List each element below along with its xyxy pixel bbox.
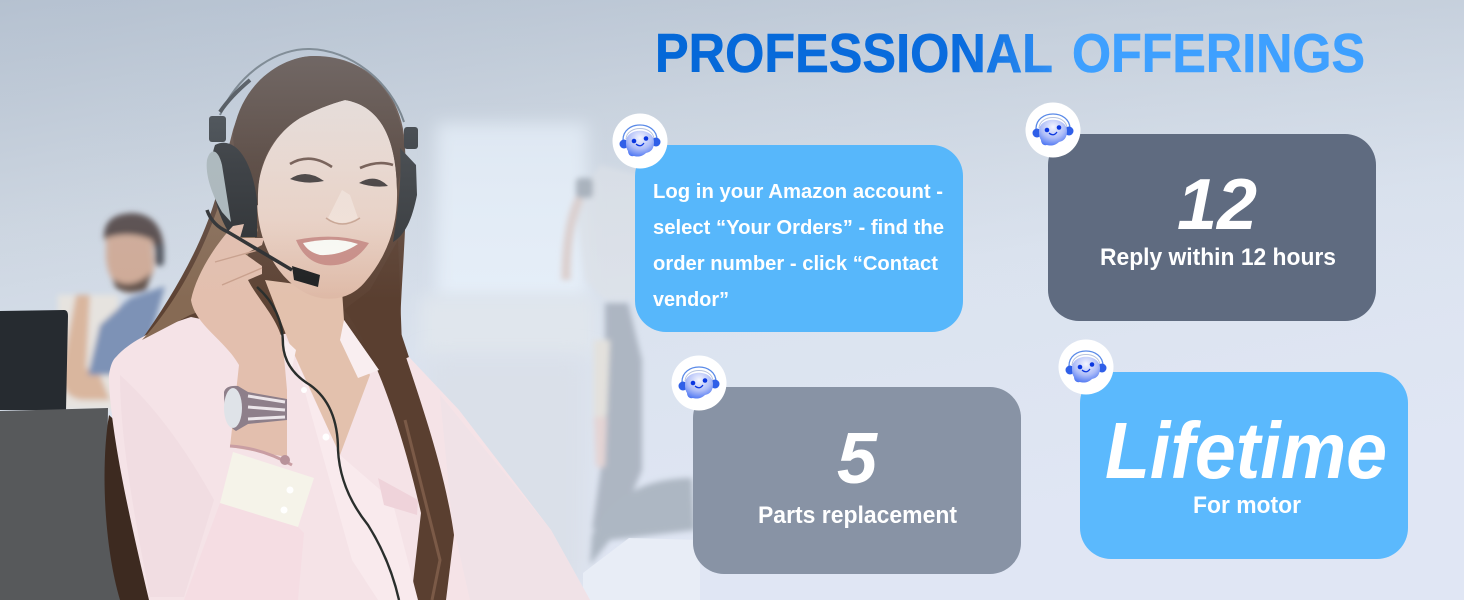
ear cup right	[393, 127, 418, 242]
blurred man with headset	[58, 213, 165, 410]
mouth	[296, 237, 369, 265]
hair front left	[142, 170, 258, 340]
ear cup left	[207, 116, 257, 237]
chair	[0, 408, 122, 600]
title: OFFERINGS	[1072, 22, 1365, 84]
word: Lifetime: Lifetime	[1105, 406, 1387, 495]
desk	[583, 538, 700, 600]
microphone	[207, 210, 320, 287]
text: contact steps: vendor”	[653, 288, 729, 311]
face	[257, 100, 397, 299]
label: for motor: For motor	[1193, 492, 1301, 519]
text: contact steps: order number - click “Contact	[653, 252, 938, 275]
shirt body	[109, 317, 590, 600]
headband	[220, 49, 404, 122]
title: PROFESSIONAL	[655, 22, 1053, 84]
label: reply time: Reply within 12 hours	[1100, 244, 1336, 271]
cuff sleeve	[184, 503, 304, 600]
eyes and brows	[290, 159, 332, 167]
icon: support mascot 2	[1026, 102, 1080, 158]
hand	[191, 224, 287, 457]
shirt sleeve shading	[120, 375, 214, 597]
monitor	[0, 310, 68, 410]
title	[655, 22, 1365, 84]
text: contact steps: Log in your Amazon account -	[653, 180, 943, 203]
photo top fade	[0, 0, 1464, 300]
watch	[224, 386, 287, 431]
number: 12: 12	[1177, 165, 1257, 245]
far sleeve fade	[440, 395, 590, 600]
icon: support mascot 3	[672, 356, 726, 410]
blurred colleague in background	[566, 165, 695, 565]
label: parts replacement: Parts replacement	[758, 502, 957, 529]
number: 5: 5	[837, 419, 878, 499]
text: contact steps: select “Your Orders” - find the	[653, 216, 944, 239]
icon: support mascot 1	[612, 114, 668, 168]
icon: support mascot 4	[1058, 340, 1114, 394]
neck and chest	[265, 280, 370, 455]
panel: contact vendor steps	[635, 145, 963, 332]
panel: reply within 12 hours	[1048, 134, 1376, 321]
woman with headset	[105, 49, 590, 600]
cable	[257, 287, 399, 600]
hair behind	[140, 56, 454, 600]
hair front right	[344, 240, 454, 600]
hair front top	[233, 56, 405, 215]
shirt collar and placket	[340, 320, 379, 378]
nose	[328, 190, 358, 223]
panel: lifetime for motor	[1080, 372, 1408, 559]
panel: parts replacement	[693, 387, 1021, 574]
bracelet	[230, 446, 292, 465]
